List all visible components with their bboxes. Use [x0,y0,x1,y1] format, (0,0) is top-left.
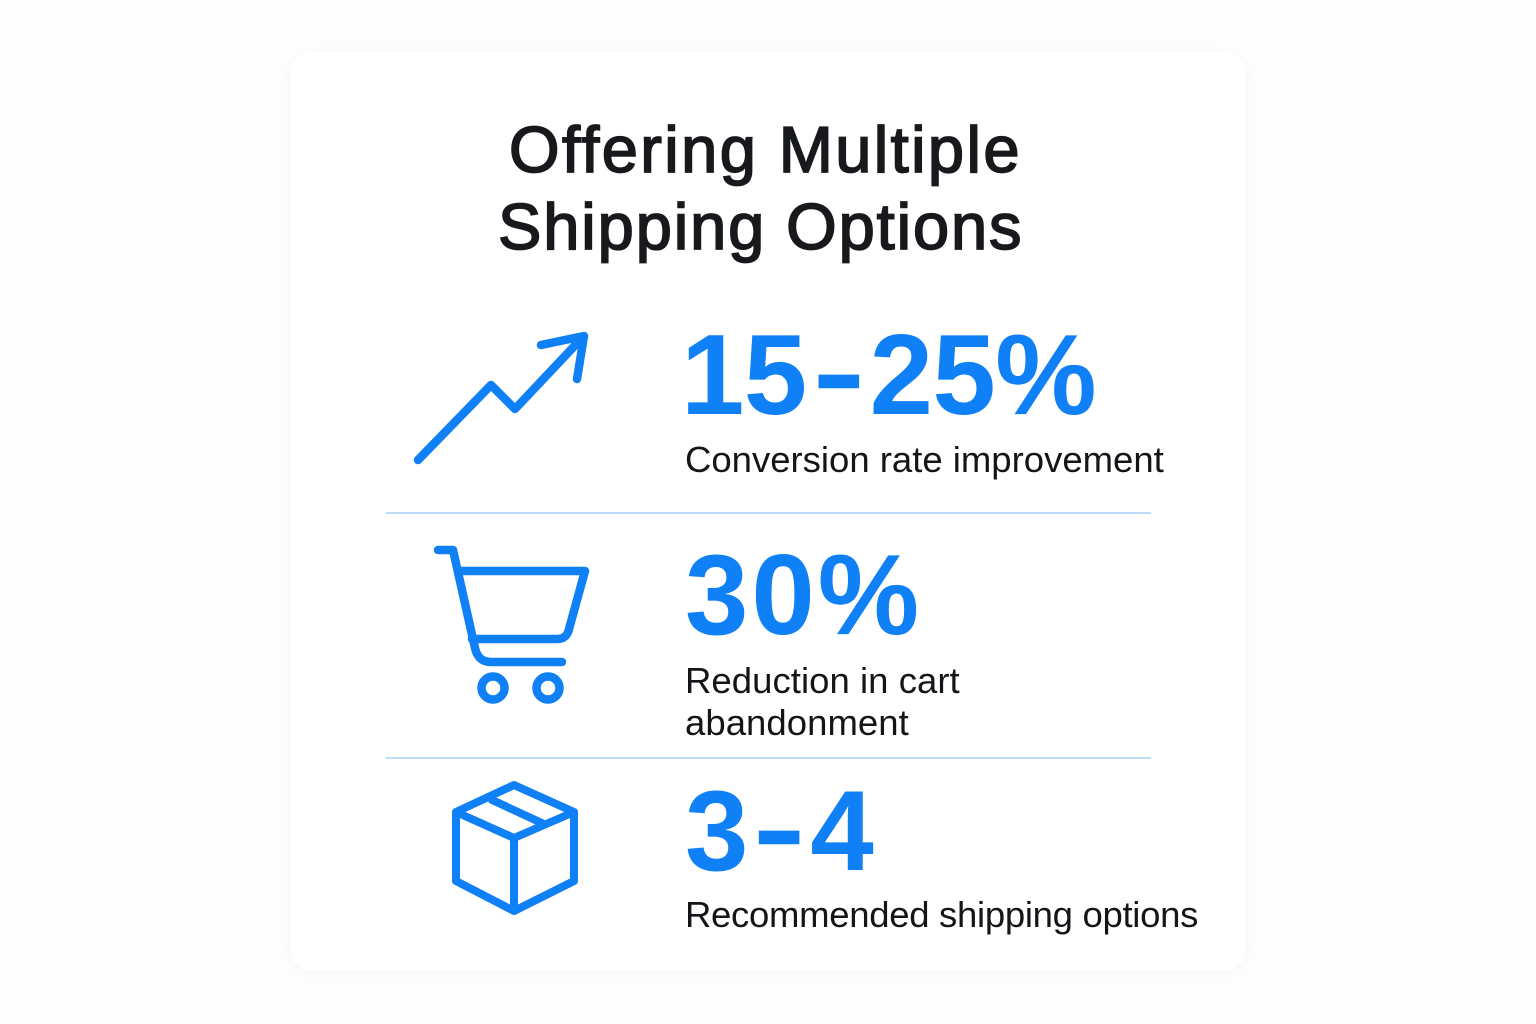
stat: 30%: 30% [685,532,922,659]
title: Shipping Options [498,190,1023,263]
label: cart abandonment [685,660,960,743]
stat: 15-25%: 15 25% [681,312,1096,439]
label: shipping options: Recommended shipping options [685,894,1198,935]
label: conversion rate: Conversion rate improvement [685,439,1164,480]
icon: shopping cart [434,546,590,704]
stat: 3-4: - [753,765,805,892]
title [498,113,1023,264]
stat: 15-25%: - [812,309,864,436]
icon: box [452,781,578,915]
stat: 3-4: 3 4 [685,768,873,895]
panel: card [291,52,1245,971]
title: Offering Multiple [509,113,1022,186]
icon: rising arrow [414,332,588,464]
label: cart abandonment: Reduction in cart [685,660,960,701]
label: cart abandonment: abandonment [685,702,909,743]
